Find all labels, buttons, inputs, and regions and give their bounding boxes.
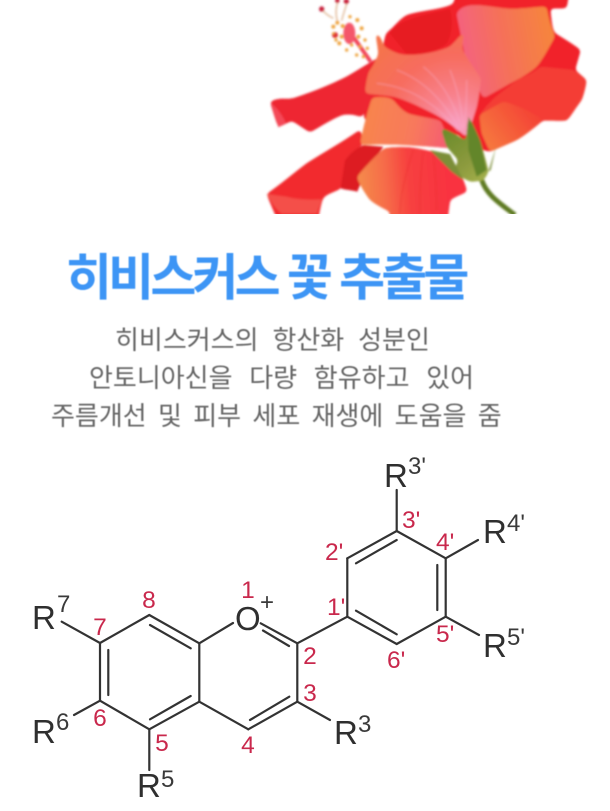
bottom petal veins (400, 150, 437, 214)
chart: anthocyanin chemical structure (32, 453, 525, 804)
flower stamen (319, 0, 371, 62)
calyx (441, 115, 489, 182)
substituent labels: R (483, 513, 507, 550)
title: 히비스커스 꽃 추출물 (66, 250, 467, 306)
substituent labels: R (334, 714, 358, 751)
substituent labels: 5' (507, 624, 525, 651)
substituent labels: R (32, 713, 56, 750)
substituent labels: 4' (507, 510, 525, 537)
atom position numbers: 6 (93, 705, 107, 732)
atom position numbers: 4 (241, 732, 255, 759)
substituent labels (32, 453, 525, 804)
upper orange petal (457, 5, 555, 98)
left petal (270, 57, 380, 132)
description text: 안토니아신을 다량 함유하고 있어 (89, 363, 474, 393)
atom position numbers: 3 (303, 680, 317, 707)
atom position numbers: 7 (93, 614, 107, 641)
atom position numbers: 2 (303, 643, 317, 670)
back red petal (363, 0, 587, 152)
substituent labels: O (235, 600, 261, 637)
atom position numbers: 1 (241, 577, 255, 604)
substituent labels: 6 (56, 709, 69, 736)
substituent labels: R (32, 599, 56, 636)
atom position numbers: 8 (142, 587, 156, 614)
image: hibiscus flower (267, 0, 587, 227)
atom position numbers (93, 507, 454, 759)
central petal (365, 29, 481, 137)
description text: 주름개선 및 피부 세포 재생에 도움을 줌 (51, 401, 502, 431)
atom position numbers: 5' (436, 621, 454, 648)
middle orange petal (360, 97, 452, 148)
atom position numbers: 5 (155, 730, 169, 757)
stem (482, 180, 515, 215)
substituent labels: 5 (161, 766, 174, 793)
molecular bonds (62, 490, 479, 770)
substituent labels: + (260, 589, 274, 616)
substituent labels: R (384, 457, 408, 494)
atom position numbers: 1' (327, 594, 345, 621)
atom position numbers: 4' (436, 529, 454, 556)
atom position numbers: 2' (325, 539, 343, 566)
description text (51, 325, 502, 431)
atom position numbers: 6' (387, 647, 405, 674)
atom position numbers: 3' (402, 507, 420, 534)
right lower petal (481, 66, 586, 122)
substituent labels: 7 (57, 591, 70, 618)
central petal veins (377, 67, 467, 132)
lower left petal (266, 130, 364, 214)
bottom petal (356, 145, 468, 214)
description text: 히비스커스의 항산화 성분인 (115, 325, 430, 355)
substituent labels: 3' (408, 453, 426, 480)
substituent labels: 3 (358, 711, 371, 738)
substituent labels: R (137, 767, 161, 804)
substituent labels: R (483, 627, 507, 664)
